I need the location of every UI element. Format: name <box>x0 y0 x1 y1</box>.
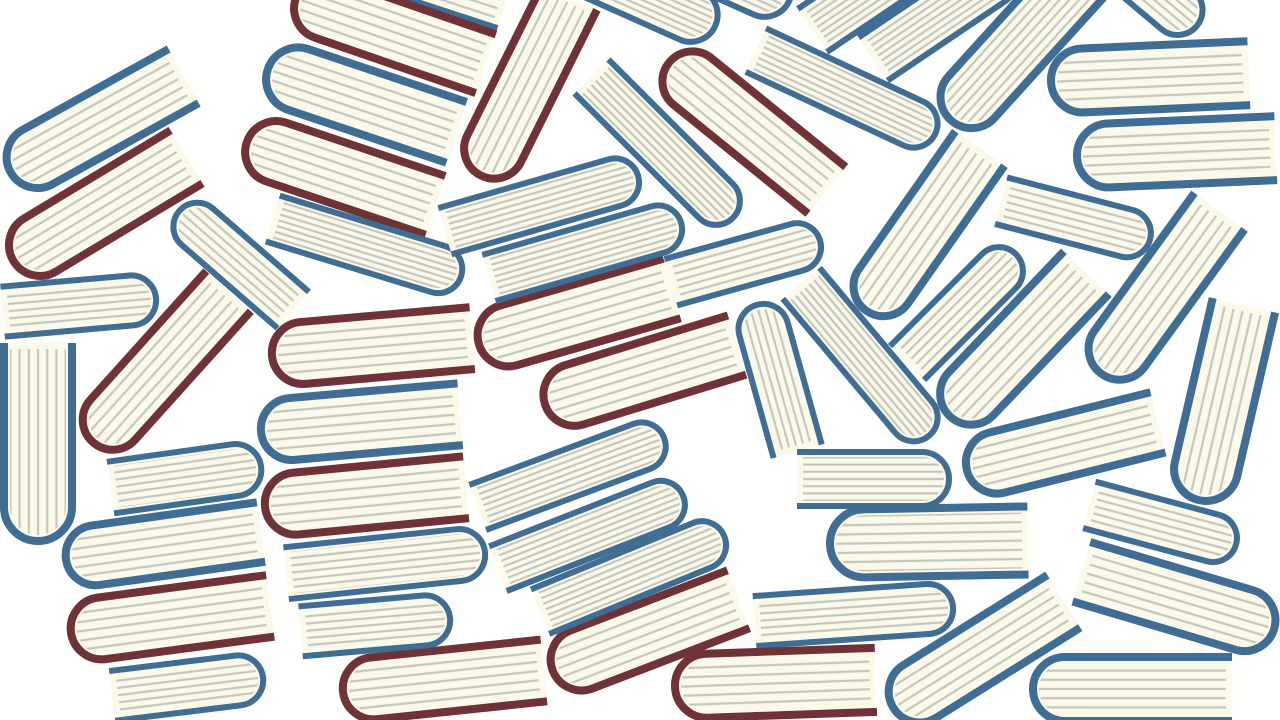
book 54: maroon <box>269 307 475 387</box>
book 53: blue <box>258 383 463 463</box>
book 1: blue <box>0 49 199 199</box>
book 29: blue <box>995 177 1156 262</box>
book 34: blue <box>1083 482 1242 567</box>
book 8: blue <box>62 502 265 589</box>
book 33: blue <box>1168 298 1275 507</box>
book 58: blue <box>482 200 688 301</box>
book 32: blue <box>1076 193 1245 392</box>
book 5: maroon <box>70 271 251 462</box>
book 18: blue <box>574 59 750 235</box>
book 3: blue <box>164 193 309 328</box>
book 16: maroon <box>454 0 597 189</box>
book 57: blue <box>664 218 827 305</box>
book 30: blue <box>890 237 1033 380</box>
book 21: blue, cut by top edge <box>690 0 800 25</box>
book 50: blue <box>283 526 488 599</box>
book 55: maroon <box>470 259 681 374</box>
book 4: blue <box>0 273 158 337</box>
book 47: blue <box>531 514 733 634</box>
book 7: blue <box>107 441 265 513</box>
book 40: blue <box>829 506 1029 578</box>
book 46: maroon <box>542 570 750 700</box>
book 41: blue <box>753 582 955 646</box>
book 13: blue <box>258 39 467 163</box>
book 12: maroon <box>286 0 496 93</box>
book 44: maroon, cut by bottom edge <box>674 648 877 719</box>
book 48: blue <box>489 474 692 591</box>
book 23: blue, cut by top edge <box>859 0 1026 81</box>
book 15: blue <box>266 196 468 299</box>
book 6: blue vertical <box>4 343 72 541</box>
book 59: blue <box>438 153 645 254</box>
book 51: blue <box>298 593 452 656</box>
book 28: blue <box>842 131 1004 328</box>
book 9: maroon <box>67 575 274 663</box>
book 39: blue <box>797 452 949 506</box>
book 31: blue <box>927 251 1109 437</box>
book 26: blue <box>1050 41 1250 114</box>
book 43: blue, cut by bottom edge <box>1033 657 1232 720</box>
book 24: blue, cut by top edge <box>928 0 1105 141</box>
book 11: blue, cut by top edge <box>349 0 515 29</box>
book 37: blue <box>733 298 822 458</box>
book 25: blue, cut by top edge <box>1106 0 1213 45</box>
book 17: blue, cut by top edge <box>552 0 726 50</box>
book 56: maroon <box>536 315 746 433</box>
book 35: blue <box>1073 542 1280 659</box>
book 45: maroon, cut by bottom edge <box>340 640 547 720</box>
book 52: maroon <box>262 456 469 537</box>
book 22: blue, cut by top edge <box>798 0 957 52</box>
book 10: blue <box>109 653 266 720</box>
book 14: maroon <box>237 113 445 235</box>
book 2: maroon <box>0 130 203 288</box>
book 27: blue <box>1076 116 1277 189</box>
book 20: blue <box>746 28 945 155</box>
book 49: blue <box>469 416 673 530</box>
book 19: maroon <box>650 39 846 214</box>
book 36: blue <box>959 392 1166 500</box>
book 42: blue <box>877 575 1080 720</box>
book 38: blue <box>783 268 947 451</box>
